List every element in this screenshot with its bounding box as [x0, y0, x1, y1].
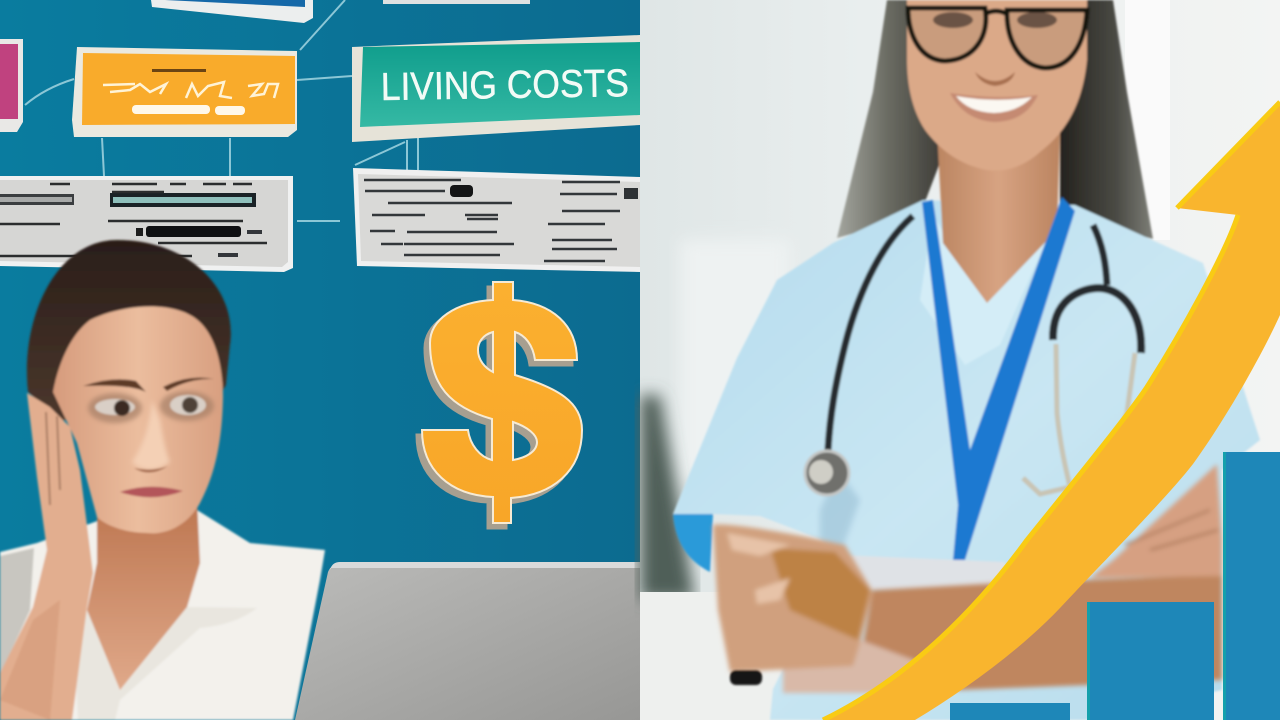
arrow: rising growth — [823, 102, 1280, 720]
card: pink sign — [0, 39, 23, 132]
glasses — [908, 8, 1087, 68]
hand and arm — [0, 393, 93, 720]
nose — [975, 72, 1015, 86]
mouth — [120, 487, 183, 497]
card: top fragments — [151, 0, 530, 23]
scrub collar shading — [920, 205, 1062, 365]
neck and V — [937, 130, 1060, 303]
clipboard — [840, 555, 1005, 590]
face — [53, 306, 223, 533]
nurse — [673, 0, 1260, 720]
chart: rising bars — [950, 452, 1280, 720]
panel: nurse salary growth — [640, 0, 1280, 720]
hair — [27, 240, 231, 420]
eyes — [933, 12, 973, 28]
shirt — [0, 510, 325, 720]
nose — [132, 400, 170, 470]
pen — [730, 670, 762, 685]
card: right document — [353, 168, 640, 272]
woman worried — [0, 240, 325, 720]
hair — [837, 0, 960, 238]
eyes — [88, 391, 214, 423]
scrub top — [673, 200, 1260, 720]
face — [907, 0, 1087, 171]
scribbled label — [103, 82, 278, 98]
panel: living costs stress — [0, 0, 640, 720]
card: left document — [0, 176, 293, 272]
brows — [83, 378, 214, 392]
forearm and hand — [713, 464, 1222, 693]
sleeve trim — [673, 514, 713, 572]
stethoscope chest piece — [805, 451, 849, 495]
smile — [950, 93, 1038, 122]
card: orange sign — [72, 47, 297, 137]
laptop — [295, 562, 640, 720]
card: living costs sign — [352, 35, 640, 142]
icon: dollar sign — [417, 282, 582, 528]
lanyard — [922, 197, 1075, 560]
sign title: LIVING COSTS — [380, 62, 629, 109]
stethoscope — [828, 216, 1141, 450]
neck — [87, 500, 200, 690]
